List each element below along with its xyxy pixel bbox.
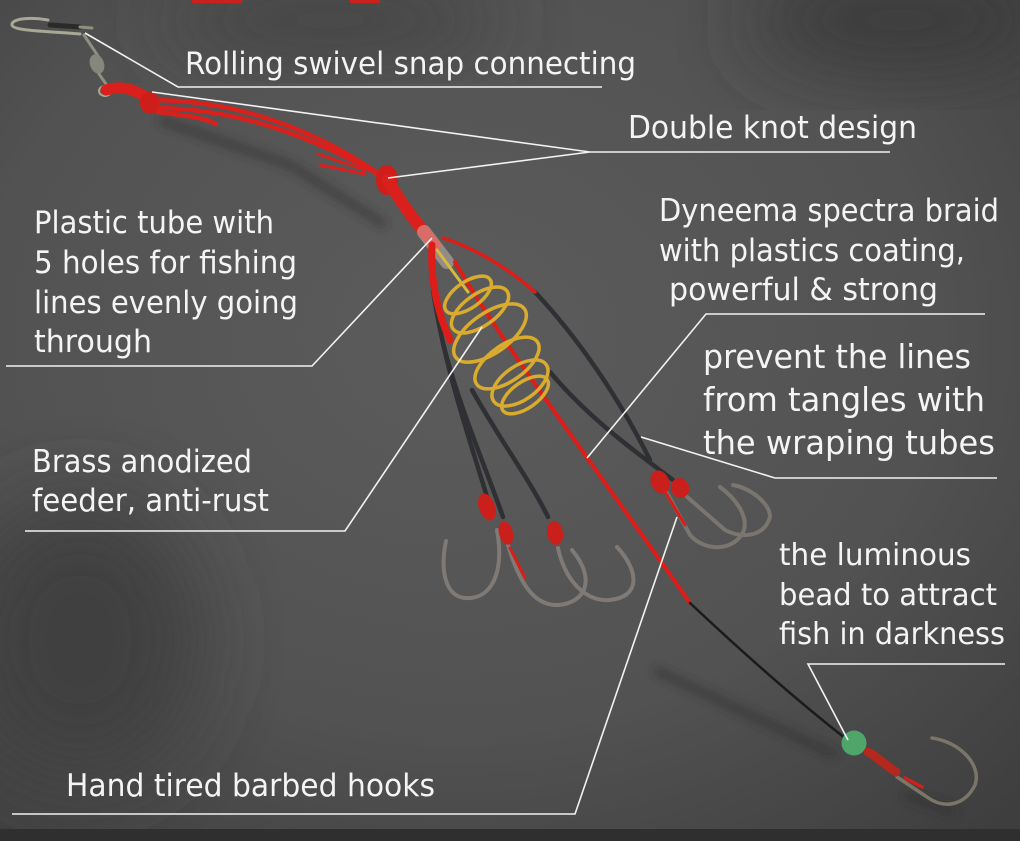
label: dyneema: powerful & strong <box>669 272 938 308</box>
label: plastic tube: through <box>34 324 152 360</box>
label: dyneema: Dyneema spectra braid <box>659 193 999 229</box>
braid leader <box>587 314 985 458</box>
icon: rolling swivel snap <box>12 18 111 96</box>
single hook with red knot <box>868 738 976 804</box>
label: plastic tube: Plastic tube with <box>34 205 274 241</box>
icon: brass feeder coil <box>437 250 556 421</box>
label: brass feeder <box>32 444 269 519</box>
icon: luminous bead <box>842 730 866 756</box>
hooks group 1 <box>444 530 633 605</box>
hooks group 2 <box>667 485 770 547</box>
plastic tube leader <box>6 238 432 366</box>
label: plastic tube: lines evenly going <box>34 285 298 321</box>
label: prevent tangles: prevent the lines <box>703 337 971 376</box>
label: dyneema <box>659 193 999 308</box>
label: hooks: Hand tired barbed hooks <box>66 768 435 804</box>
label: prevent tangles: the wraping tubes <box>703 423 995 462</box>
red double knot braid <box>106 88 435 245</box>
red knots on hooks <box>475 467 692 546</box>
cropped red title remnant <box>192 0 380 3</box>
bead leader <box>808 664 1005 740</box>
plastic tube <box>424 232 447 262</box>
double knot leaders <box>152 92 890 178</box>
label: plastic tube <box>34 205 298 360</box>
label: luminous bead: fish in darkness <box>779 617 1005 652</box>
label: luminous bead <box>779 538 1005 652</box>
label: brass feeder: Brass anodized <box>32 444 252 480</box>
label: double knot: Double knot design <box>628 110 917 146</box>
tube wrap leader <box>641 437 997 478</box>
label: luminous bead: the luminous <box>779 538 971 573</box>
swivel leader <box>85 33 602 87</box>
label: dyneema: with plastics coating, <box>659 233 965 269</box>
label: brass feeder: feeder, anti-rust <box>32 483 269 519</box>
red lines through feeder <box>432 238 690 603</box>
dark leader lines <box>433 290 673 517</box>
hooks leader <box>12 517 677 814</box>
label: plastic tube: 5 holes for fishing <box>34 245 297 281</box>
label: prevent tangles <box>703 337 995 462</box>
feeder leader <box>25 327 482 531</box>
black line to bead <box>690 603 845 738</box>
label: luminous bead: bead to attract <box>779 578 997 613</box>
label: rolling swivel: Rolling swivel snap connecting <box>185 46 636 82</box>
label: prevent tangles: from tangles with <box>703 380 985 419</box>
